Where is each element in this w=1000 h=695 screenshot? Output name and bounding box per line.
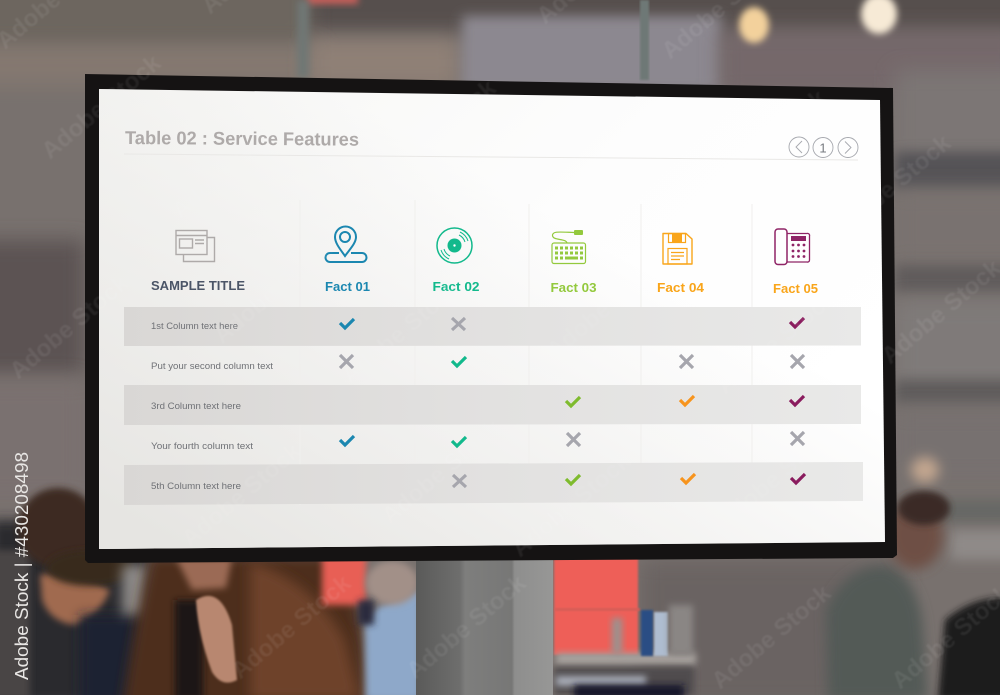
column: fact 04 <box>657 234 705 295</box>
row 3 marks <box>566 396 804 406</box>
stock watermarks: Adobe Stock <box>827 129 957 245</box>
column: fact 01 <box>325 226 370 294</box>
column: fact 05 <box>773 229 818 296</box>
column dividers <box>300 200 752 505</box>
row 2 marks <box>340 355 804 368</box>
icon: windows <box>176 230 214 262</box>
column: fact 04: Fact 04 <box>657 280 705 295</box>
stock id watermark: Adobe Stock | #430208498 <box>12 452 32 680</box>
stock watermarks: Adobe Stock <box>167 109 297 225</box>
check and cross marks <box>340 318 805 487</box>
column: fact 02: Fact 02 <box>432 279 480 294</box>
stock watermarks: Adobe Stock <box>209 234 339 350</box>
stock watermarks: Adobe Stock <box>499 119 629 235</box>
row labels: 5th Column text here <box>151 481 241 491</box>
row bands <box>124 307 863 505</box>
stock watermarks: Adobe Stock <box>507 447 637 563</box>
pagination controls <box>789 137 858 158</box>
row labels: Put your second column text <box>151 361 274 371</box>
stand post <box>416 558 553 695</box>
sample title: SAMPLE TITLE <box>151 278 245 293</box>
stock watermarks: Adobe Stock <box>702 84 832 200</box>
stock watermarks: Adobe Stock <box>542 249 672 365</box>
stock watermarks: Adobe Stock <box>5 269 135 385</box>
row labels: 1st Column text here <box>151 321 238 331</box>
row labels: Your fourth column text <box>151 441 254 451</box>
stock watermarks: Adobe Stock <box>37 49 167 165</box>
blurred people left <box>0 488 553 695</box>
row 1 marks <box>340 318 804 330</box>
row 4 marks <box>340 432 804 446</box>
stock watermarks: Adobe Stock <box>402 569 532 685</box>
pagination controls: 1 <box>819 140 827 156</box>
row 5 marks <box>453 474 805 487</box>
stock watermarks: Adobe Stock <box>712 419 842 535</box>
stock watermarks: Adobe Stock <box>707 579 837 695</box>
screen panel <box>99 89 885 549</box>
row labels: 3rd Column text here <box>151 401 241 411</box>
background: red booth wall <box>554 555 696 695</box>
column: fact 02 <box>432 228 480 294</box>
stock watermarks: Adobe Stock <box>377 414 507 530</box>
blurred person right <box>826 457 1000 695</box>
stock watermarks: Adobe Stock <box>712 284 842 400</box>
display monitor frame <box>85 74 897 563</box>
stock watermarks: Adobe Stock <box>372 74 502 190</box>
row labels <box>151 321 274 491</box>
table <box>124 127 863 505</box>
title: Table 02 : Service Features <box>125 127 359 150</box>
column: fact 03: Fact 03 <box>550 280 596 295</box>
column: fact 01: Fact 01 <box>325 279 370 294</box>
column: fact 05: Fact 05 <box>773 281 818 296</box>
stock watermarks: Adobe Stock <box>177 437 307 553</box>
stock watermarks: Adobe Stock <box>337 274 467 390</box>
column: fact 03 <box>550 230 596 295</box>
stock watermarks: Adobe Stock <box>227 569 357 685</box>
